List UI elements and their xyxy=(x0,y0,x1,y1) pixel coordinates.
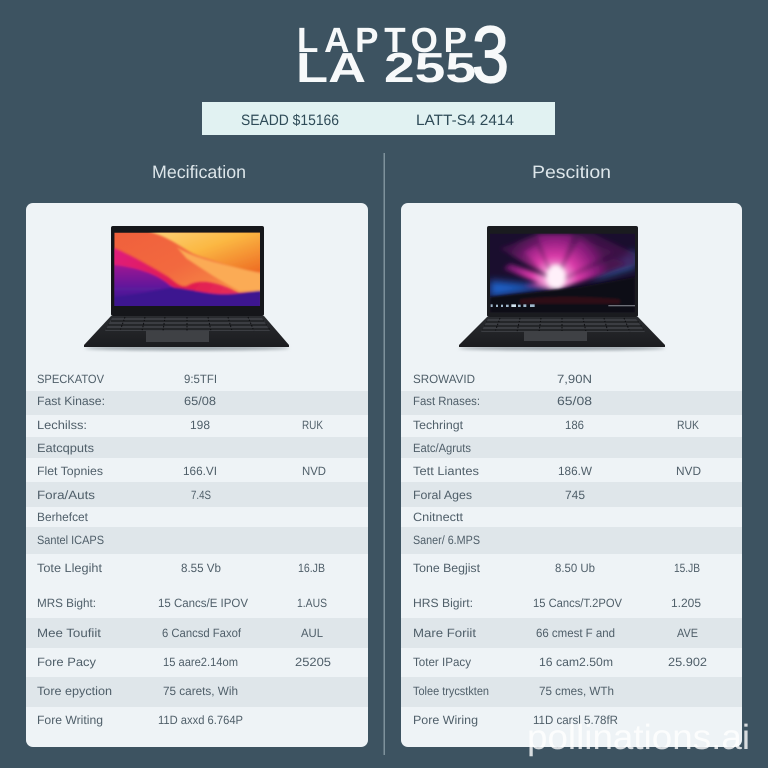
left spec rows: Lechilss: xyxy=(37,418,87,432)
right spec rows: 16 cam2.50m xyxy=(539,655,613,669)
left spec rows: 15 Cancs/E IPOV xyxy=(158,596,248,610)
right table row bands xyxy=(401,391,742,707)
right spec rows: 75 cmes, WTh xyxy=(539,684,614,698)
left spec rows: Tore epyction xyxy=(37,684,112,698)
left spec rows: RUK xyxy=(302,418,323,432)
center divider xyxy=(384,153,385,755)
right spec rows: Toter IPacy xyxy=(413,655,471,669)
left spec rows: 11D axxd 6.764P xyxy=(158,713,243,727)
subtitle band: SEADD $15166 xyxy=(241,112,339,129)
right spec rows: Fast Rnases: xyxy=(413,394,480,408)
panel: right specification card xyxy=(401,203,742,747)
right spec rows: 7,90N xyxy=(557,372,592,386)
right spec rows: 745 xyxy=(565,488,585,502)
heading: left column: Mecification xyxy=(152,162,246,182)
left spec rows: 9:5TFI xyxy=(184,372,217,386)
left spec rows: Berhefcet xyxy=(37,510,89,524)
heading: right column: Pescition xyxy=(532,162,611,182)
left spec rows: MRS Bight: xyxy=(37,596,96,610)
right spec rows: Saner/ 6.MPS xyxy=(413,533,480,547)
right spec rows: 65/08 xyxy=(557,394,592,408)
title xyxy=(296,10,509,99)
right spec rows xyxy=(413,372,707,727)
left spec rows: 75 carets, Wih xyxy=(163,684,238,698)
right spec rows: RUK xyxy=(677,418,699,432)
right spec rows: 8.50 Ub xyxy=(555,561,595,575)
watermark: pollinations.ai xyxy=(527,718,750,757)
right spec rows: 15.JB xyxy=(674,561,700,575)
right spec rows: AVE xyxy=(677,626,698,640)
right spec rows: NVD xyxy=(676,464,701,478)
title: LAPTOP xyxy=(297,21,467,60)
right spec rows: HRS Bigirt: xyxy=(413,596,473,610)
right spec rows: 1.205 xyxy=(671,596,701,610)
left spec rows: 1.AUS xyxy=(297,596,327,610)
right spec rows: 66 cmest F and xyxy=(536,626,615,640)
title: LA xyxy=(296,44,366,91)
left spec rows: Eatcqputs xyxy=(37,441,94,455)
right spec rows: Tett Liantes xyxy=(413,464,479,478)
right spec rows: SROWAVID xyxy=(413,372,475,386)
right spec rows: Tone Begjist xyxy=(413,561,481,575)
left table row bands xyxy=(26,391,368,707)
left spec rows: 198 xyxy=(190,418,210,432)
right spec rows: Mare Foriit xyxy=(413,626,477,640)
icon: left laptop xyxy=(84,226,289,350)
right spec rows: Techringt xyxy=(413,418,464,432)
left laptop screen xyxy=(112,231,262,309)
left spec rows: 7.4S xyxy=(191,488,211,502)
panel: left specification card xyxy=(26,203,368,747)
right spec rows: Pore Wiring xyxy=(413,713,478,727)
right spec rows: Cnitnectt xyxy=(413,510,464,524)
title: 255 xyxy=(384,44,476,91)
subtitle band xyxy=(202,102,555,135)
right spec rows: Foral Ages xyxy=(413,488,472,502)
left spec rows: 16.JB xyxy=(298,561,325,575)
right spec rows: Tolee trycstkten xyxy=(413,684,489,698)
left spec rows: AUL xyxy=(301,626,323,640)
left spec rows: Tote Llegiht xyxy=(37,561,103,575)
right spec rows: Eatc/Agruts xyxy=(413,441,471,455)
right spec rows: 15 Cancs/T.2POV xyxy=(533,596,622,610)
left spec rows: Fora/Auts xyxy=(37,488,95,502)
left spec rows: 6 Cancsd Faxof xyxy=(162,626,242,640)
right laptop screen xyxy=(490,234,635,314)
icon: right laptop xyxy=(459,226,665,350)
left spec rows: Fore Pacy xyxy=(37,655,96,669)
left spec rows: 166.VI xyxy=(183,464,217,478)
right spec rows: 186.W xyxy=(558,464,593,478)
right spec rows: 25.902 xyxy=(668,655,707,669)
left spec rows: Fast Kinase: xyxy=(37,394,105,408)
left spec rows: 25205 xyxy=(295,655,331,669)
right spec rows: 186 xyxy=(565,418,584,432)
left spec rows xyxy=(37,372,331,727)
subtitle band: LATT-S4 2414 xyxy=(416,112,514,129)
left spec rows: 65/08 xyxy=(184,394,216,408)
left spec rows: 15 aare2.14om xyxy=(163,655,238,669)
left spec rows: Flet Topnies xyxy=(37,464,103,478)
right spec rows: 11D carsl 5.78fR xyxy=(533,713,618,727)
left spec rows: 8.55 Vb xyxy=(181,561,221,575)
left spec rows: NVD xyxy=(302,464,326,478)
title: 3 xyxy=(472,10,509,99)
left spec rows: Mee Toufiit xyxy=(37,626,102,640)
left spec rows: Fore Writing xyxy=(37,713,103,727)
left spec rows: SPECKATOV xyxy=(37,372,104,386)
left spec rows: Santel ICAPS xyxy=(37,533,104,547)
